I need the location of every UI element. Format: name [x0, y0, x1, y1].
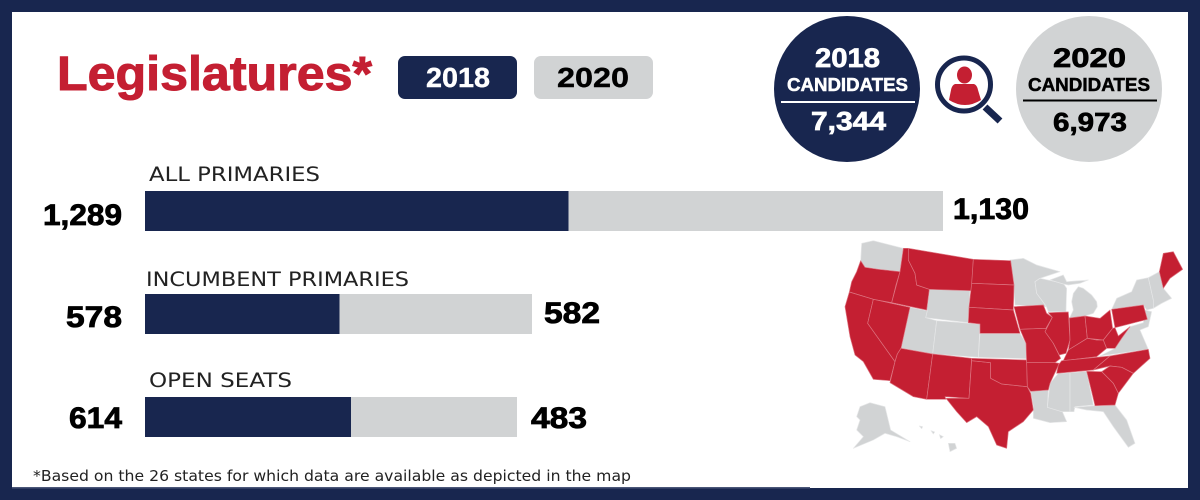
circle: 2018 candidates: 2018	[815, 43, 880, 73]
legend: 2020	[534, 56, 653, 99]
legend: 2018: 2018	[426, 62, 490, 93]
circle: 2020 candidates: CANDIDATES	[1028, 75, 1150, 95]
chart: open seats	[69, 369, 587, 437]
chart: incumbent primaries: 578	[66, 301, 122, 334]
chart: incumbent primaries: 582	[544, 297, 600, 330]
chart: all primaries: 1,130	[953, 193, 1029, 226]
red states	[845, 248, 1183, 448]
circle: 2018 candidates	[774, 16, 920, 162]
circle: 2020 candidates: 6,973	[1053, 107, 1127, 137]
chart: incumbent primaries	[66, 268, 600, 334]
footnote: *Based on the 26 states for which data are available as depicted in the map	[33, 467, 631, 485]
legend: 2020: 2020	[557, 62, 629, 93]
circle: 2020 candidates	[1016, 16, 1162, 162]
chart: all primaries: 1,289	[43, 199, 122, 232]
chart: all primaries	[43, 163, 1029, 232]
chart: open seats: OPEN SEATS	[149, 369, 292, 392]
gray states	[853, 241, 1172, 452]
title: Legislatures*	[57, 48, 372, 101]
icon: magnifying glass with person	[938, 58, 1000, 121]
chart: open seats: 614	[69, 402, 122, 435]
chart: all primaries: ALL PRIMARIES	[149, 163, 320, 186]
circle: 2020 candidates: 2020	[1053, 43, 1126, 73]
legend: 2018	[398, 56, 517, 99]
chart: incumbent primaries: INCUMBENT PRIMARIES	[146, 268, 409, 291]
map: US states	[845, 241, 1183, 452]
circle: 2018 candidates: CANDIDATES	[787, 75, 908, 95]
chart: open seats: 483	[531, 402, 587, 435]
circle: 2018 candidates: 7,344	[811, 106, 887, 136]
